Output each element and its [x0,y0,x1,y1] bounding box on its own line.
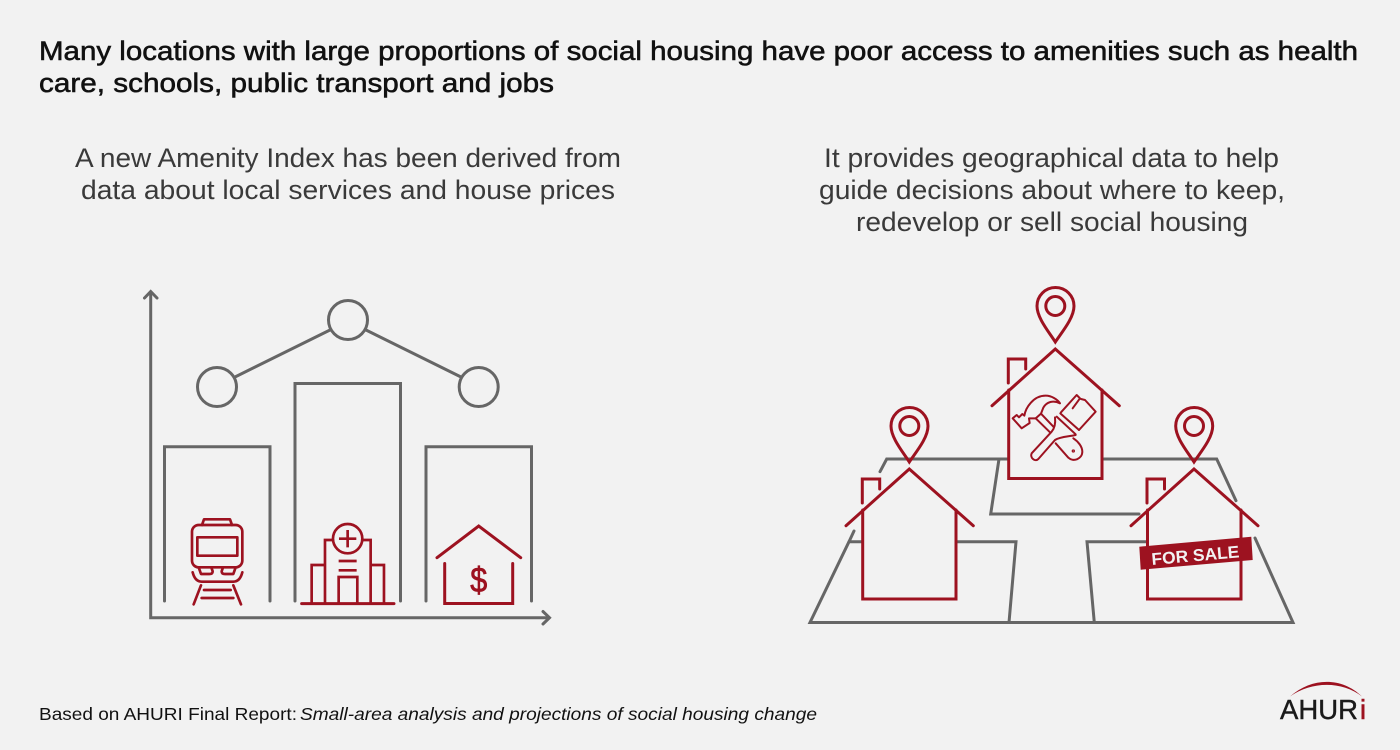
left subheading: A new Amenity Index has been derived from [75,143,621,173]
right subheading [819,143,1285,237]
icon: house with dollar sign: $ [470,561,487,600]
line with three data points [198,300,498,406]
chart bars [164,384,532,601]
house: redevelop, with location pin [992,288,1119,478]
chart axes [144,292,550,624]
icon: hospital [302,524,394,604]
amenity index chart [144,292,550,624]
title [39,36,1358,98]
map streets and lots [810,459,1293,622]
for sale sign: FOR SALE [1151,542,1240,569]
house: for sale, with location pin [1131,408,1258,599]
source note: Based on AHURI Final Report: [39,704,297,724]
for sale sign [1139,537,1253,570]
icon: house with dollar sign [437,526,521,604]
icon: train [192,519,242,604]
title: care, schools, public transport and jobs [39,68,554,98]
right subheading: redevelop or sell social housing [856,207,1248,237]
right subheading: guide decisions about where to keep, [819,175,1285,205]
source note [39,704,817,724]
logo: AHURI: i [1360,694,1366,725]
house: plain, with location pin [846,408,973,599]
left subheading: data about local services and house prices [81,175,615,205]
logo: AHURI: AHUR [1280,694,1358,725]
icon: hammer and paintbrush [1013,395,1096,460]
source note: Small-area analysis and projections of social housing change [300,704,817,724]
right subheading: It provides geographical data to help [824,143,1279,173]
left subheading [75,143,621,205]
title: Many locations with large proportions of social housing have poor access to amenities such as health [39,36,1358,66]
logo: AHURI [1280,682,1366,725]
neighbourhood map [810,288,1293,622]
